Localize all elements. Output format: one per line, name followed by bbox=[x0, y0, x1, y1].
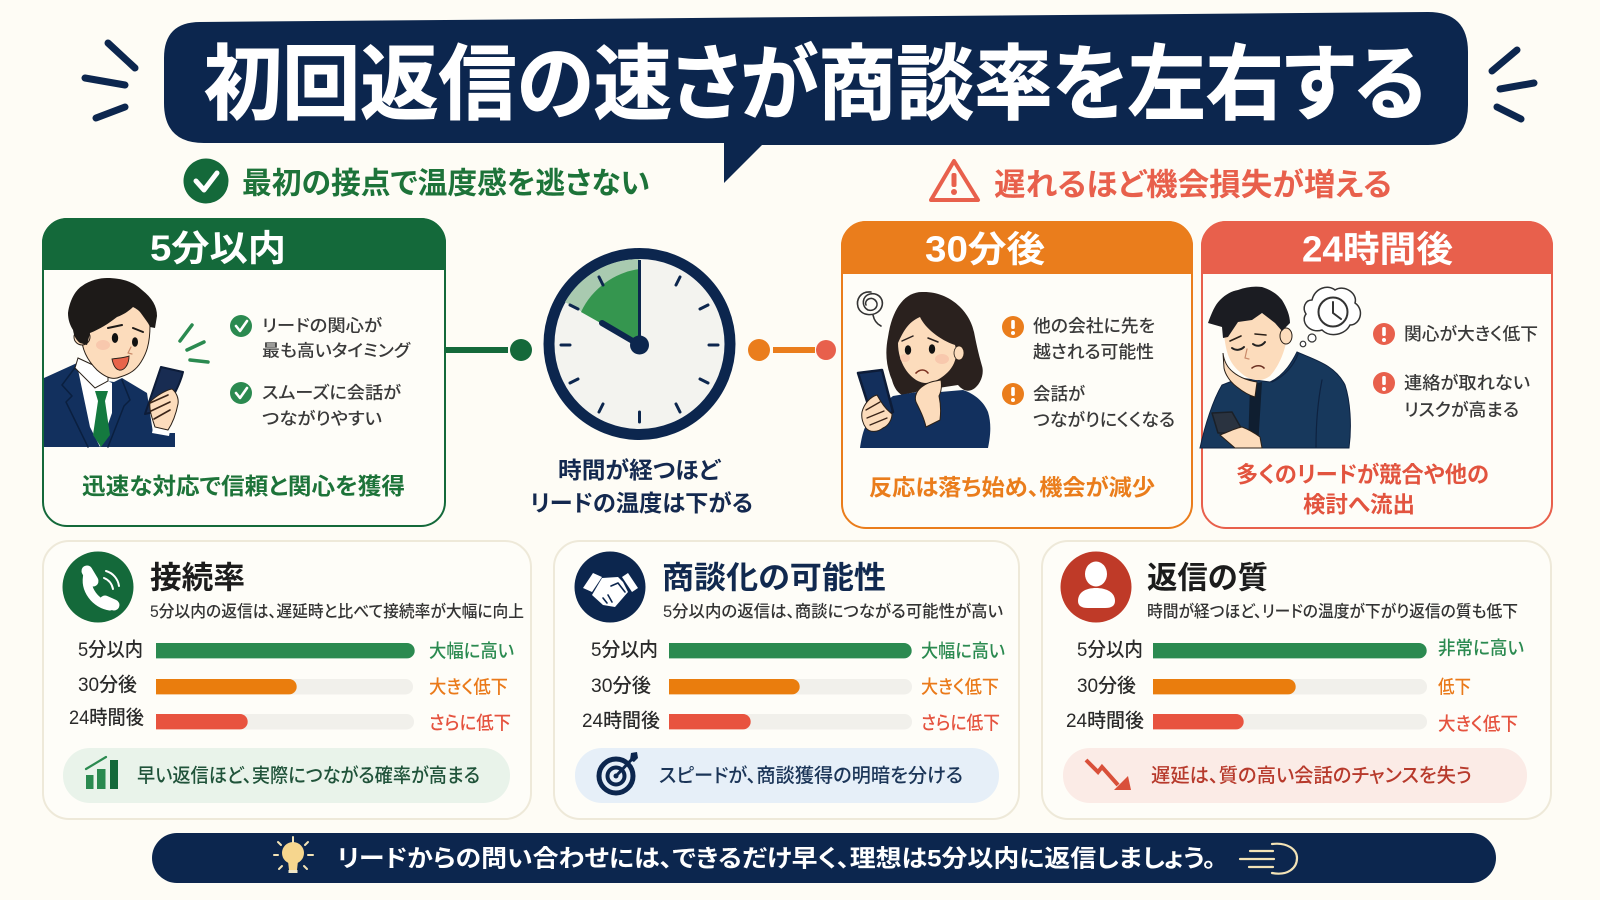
illustration: tired man bbox=[1200, 287, 1350, 448]
bullet: unreachable risk: 連絡が取れない bbox=[1404, 373, 1530, 393]
panel: connection rate bbox=[43, 541, 531, 819]
icon: light bulb bbox=[274, 837, 313, 873]
bottom call to action: リードからの問い合わせには、できるだけ早く、理想は5分以内に返信しましょう。 bbox=[337, 846, 1216, 872]
icon: thought bubble with clock bbox=[1300, 287, 1360, 347]
bar chart: connection rate: 大幅に高い bbox=[429, 640, 514, 662]
bar chart: reply quality: 大きく低下 bbox=[1438, 714, 1518, 734]
bar chart: reply quality: 非常に高い bbox=[1438, 638, 1524, 658]
caption: 24 hours bbox=[1236, 462, 1489, 518]
clock caption bbox=[530, 457, 753, 516]
heading: reply quality: 返信の質 bbox=[1147, 560, 1268, 596]
connector: green bbox=[446, 339, 532, 361]
subheading: positive bbox=[184, 158, 650, 204]
bar chart: connection rate: 大きく低下 bbox=[429, 676, 508, 698]
heading: deal potential: 商談化の可能性 bbox=[662, 560, 886, 596]
bar chart: deal potential: さらに低下 bbox=[921, 712, 1000, 734]
icon: target bbox=[599, 752, 638, 793]
burst marks left bbox=[85, 43, 135, 118]
callout: deal potential bbox=[575, 748, 999, 803]
bullet: smooth conversation: スムーズに会話が bbox=[262, 382, 401, 402]
icon: rising bar chart bbox=[86, 757, 118, 789]
callout: connection rate bbox=[63, 748, 510, 803]
icon: phone bbox=[62, 552, 134, 622]
icon: person bbox=[1060, 552, 1132, 622]
bar chart: connection rate: 30分後 bbox=[78, 674, 137, 696]
bullet: smooth conversation: つながりやすい bbox=[262, 408, 382, 428]
icon: falling arrow bbox=[1086, 760, 1131, 790]
description: deal potential: 5分以内の返信は、商談につながる可能性が高い bbox=[663, 601, 1003, 621]
bullet: unreachable risk: リスクが高まる bbox=[1404, 400, 1519, 420]
callout: reply quality bbox=[1063, 748, 1527, 803]
panel: 30 minutes bbox=[841, 221, 1193, 528]
title banner bbox=[164, 12, 1468, 183]
callout: deal potential: スピードが、商談獲得の明暗を分ける bbox=[659, 765, 963, 787]
connector: orange to red bbox=[748, 339, 836, 361]
bullet: unreachable risk bbox=[1373, 372, 1530, 420]
illustration: happy businessman bbox=[44, 278, 183, 447]
bullet: interest drops: 関心が大きく低下 bbox=[1404, 324, 1538, 344]
panel: 24 hours bbox=[1200, 221, 1553, 528]
bullet: harder to connect: 会話が bbox=[1033, 384, 1086, 404]
burst marks right bbox=[1492, 50, 1534, 119]
bar chart: connection rate: さらに低下 bbox=[429, 712, 511, 734]
clock bbox=[549, 254, 730, 434]
header: 5 minutes bbox=[42, 218, 446, 270]
heading: connection rate: 接続率 bbox=[150, 560, 245, 596]
bullet: competitors first bbox=[1002, 316, 1155, 362]
title banner: 初回返信の速さが商談率を左右する bbox=[204, 40, 1426, 130]
panel: reply quality bbox=[1042, 541, 1551, 819]
icon: confusion scribble bbox=[858, 292, 882, 326]
description: connection rate: 5分以内の返信は、遅延時と比べて接続率が大幅に向上 bbox=[150, 601, 524, 621]
callout: reply quality: 遅延は、質の高い会話のチャンスを失う bbox=[1151, 765, 1472, 787]
clock caption: リードの温度は下がる bbox=[530, 490, 753, 516]
bar chart: deal potential: 5分以内 bbox=[591, 639, 658, 661]
caption: 24 hours: 多くのリードが競合や他の bbox=[1236, 462, 1489, 488]
icon: handshake bbox=[574, 552, 646, 622]
bar chart: reply quality: 30分後 bbox=[1077, 675, 1136, 697]
illustration: worried woman bbox=[858, 292, 990, 448]
bar chart: reply quality bbox=[1066, 638, 1524, 734]
bar chart: connection rate: 24時間後 bbox=[69, 707, 144, 729]
bottom call to action bbox=[152, 833, 1496, 883]
bar chart: reply quality: 24時間後 bbox=[1066, 710, 1144, 732]
bar chart: deal potential bbox=[582, 639, 1005, 734]
bar chart: reply quality: 低下 bbox=[1438, 676, 1471, 698]
icon: excitement lines bbox=[180, 325, 208, 362]
header: 30 minutes: 30分後 bbox=[925, 228, 1045, 270]
bar chart: deal potential: 大きく低下 bbox=[921, 676, 999, 698]
icon: speeding circle bbox=[1240, 844, 1297, 874]
bar chart: connection rate: 5分以内 bbox=[78, 639, 143, 661]
header: 24 hours bbox=[1201, 221, 1553, 274]
bullet: harder to connect bbox=[1002, 383, 1175, 430]
panel: deal potential bbox=[554, 541, 1019, 819]
bar chart: deal potential: 大幅に高い bbox=[921, 640, 1005, 662]
bar chart: connection rate bbox=[69, 639, 514, 734]
callout: connection rate: 早い返信ほど、実際につながる確率が高まる bbox=[137, 765, 480, 787]
description: reply quality: 時間が経つほど、リードの温度が下がり返信の質も低下 bbox=[1147, 601, 1518, 621]
bullet: interest peak: リードの関心が bbox=[262, 316, 382, 336]
subheading: warning: 遅れるほど機会損失が増える bbox=[994, 168, 1392, 202]
panel: 5 minutes bbox=[42, 218, 446, 526]
bar chart: reply quality: 5分以内 bbox=[1077, 639, 1143, 661]
bullet: interest peak: 最も高いタイミング bbox=[262, 342, 411, 360]
bullet: interest peak bbox=[230, 315, 411, 360]
header: 5 minutes: 5分以内 bbox=[150, 228, 286, 268]
clock caption: 時間が経つほど bbox=[558, 457, 722, 483]
bullet: competitors first: 越される可能性 bbox=[1033, 342, 1154, 362]
bullet: competitors first: 他の会社に先を bbox=[1033, 316, 1155, 336]
header: 24 hours: 24時間後 bbox=[1302, 228, 1453, 270]
caption: 30 minutes: 反応は落ち始め、機会が減少 bbox=[869, 474, 1155, 500]
caption: 24 hours: 検討へ流出 bbox=[1303, 492, 1415, 518]
caption: 5 minutes: 迅速な対応で信頼と関心を獲得 bbox=[82, 473, 405, 499]
header: 30 minutes bbox=[841, 221, 1193, 274]
bar chart: deal potential: 24時間後 bbox=[582, 710, 660, 732]
subheading: positive: 最初の接点で温度感を逃さない bbox=[242, 168, 650, 200]
bar chart: deal potential: 30分後 bbox=[591, 675, 651, 697]
bullet: harder to connect: つながりにくくなる bbox=[1033, 410, 1175, 430]
bullet: smooth conversation bbox=[230, 382, 401, 428]
